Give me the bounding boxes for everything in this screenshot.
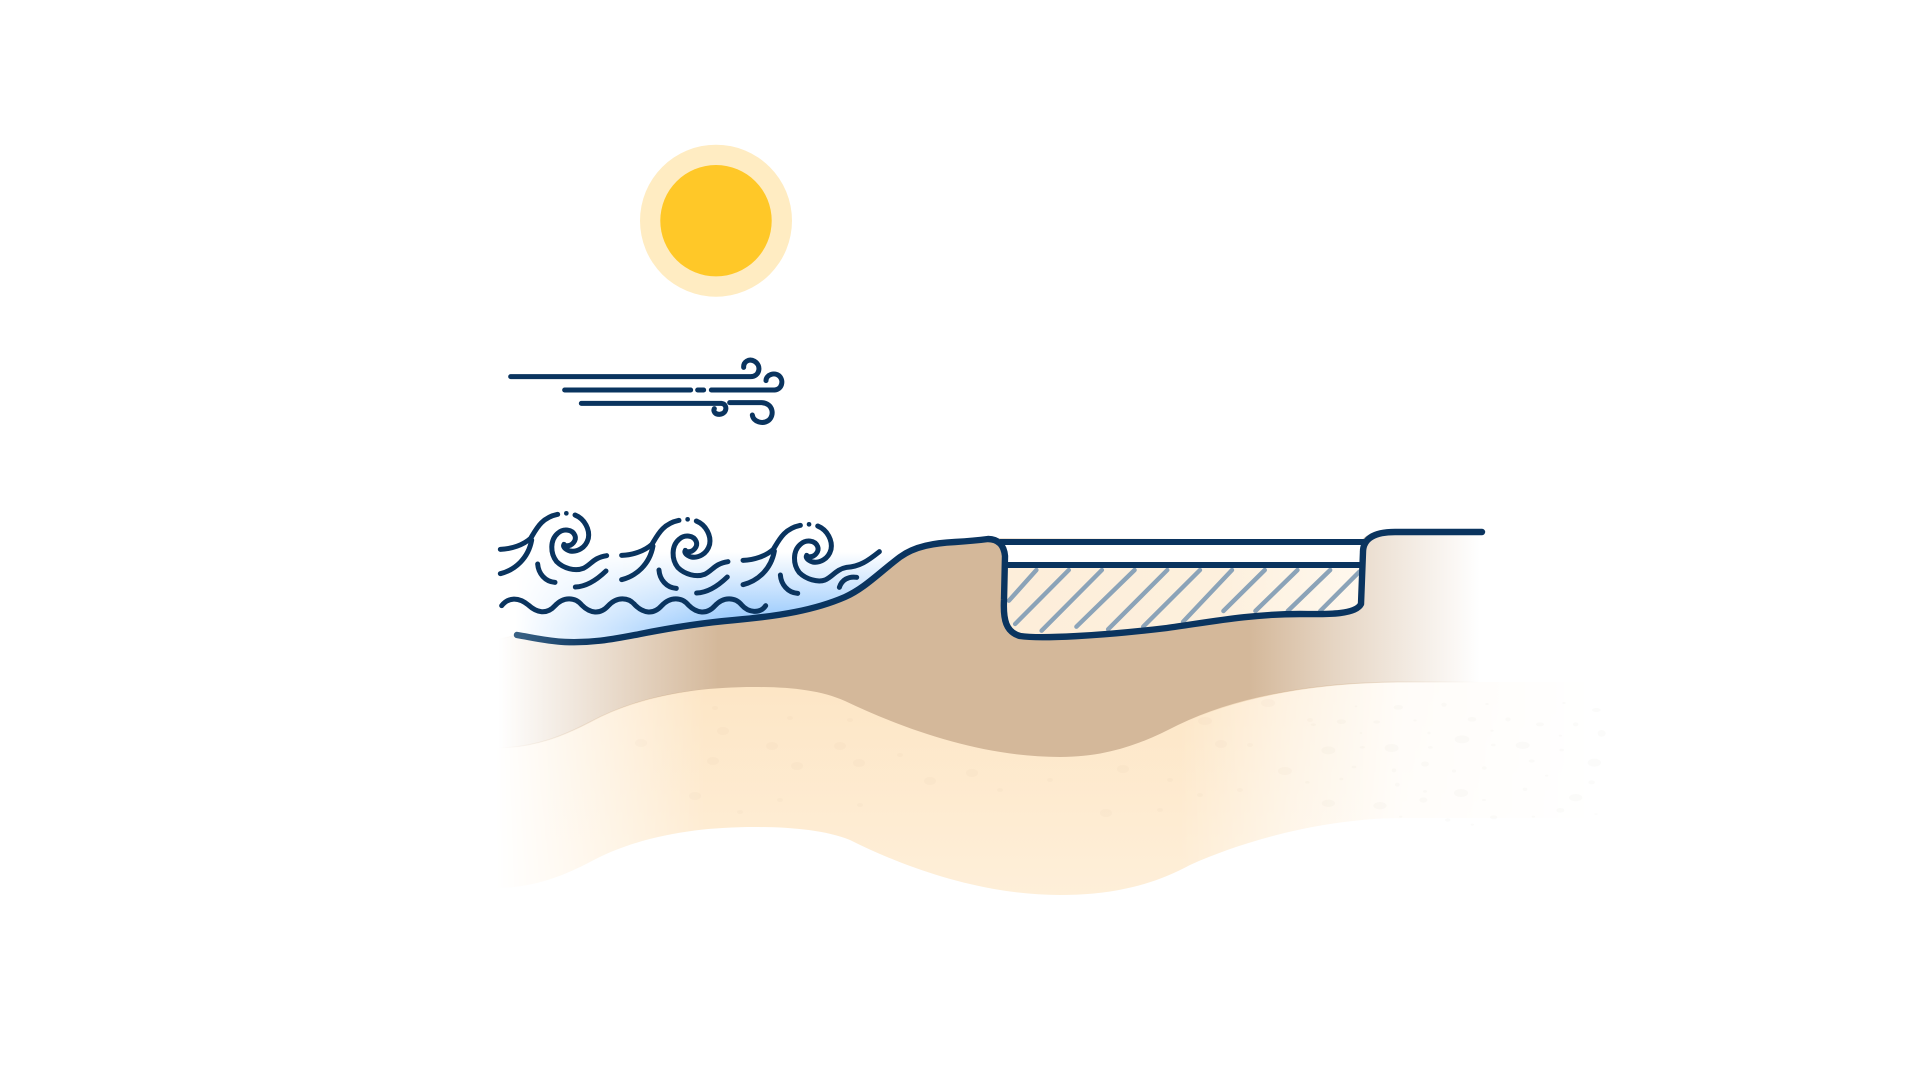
water gradient [532,558,893,639]
water body [532,558,893,639]
waves [500,511,879,612]
shoreline and pit outline [517,532,1482,642]
ripple line [502,599,766,612]
pit horizontal lines [1000,542,1364,565]
sun disc [660,165,772,276]
sun halo [640,145,792,297]
pit upper white layer [1004,542,1364,566]
sand band [529,683,1392,895]
sand layer [529,683,1392,895]
wave 3 [743,522,879,593]
sand grain speckles right fade [1305,702,1606,826]
illustration: coastal cross-section [498,144,1493,895]
pit cream fill [1004,565,1362,637]
sun [640,145,792,297]
sand grain speckles [635,699,1313,817]
wave 2 [622,517,728,593]
pit interior [1004,542,1364,637]
pit hatch lines [1009,570,1359,631]
brown dune ground [495,532,1482,757]
icon: wind lines [511,360,782,422]
wave 1 [500,511,607,587]
